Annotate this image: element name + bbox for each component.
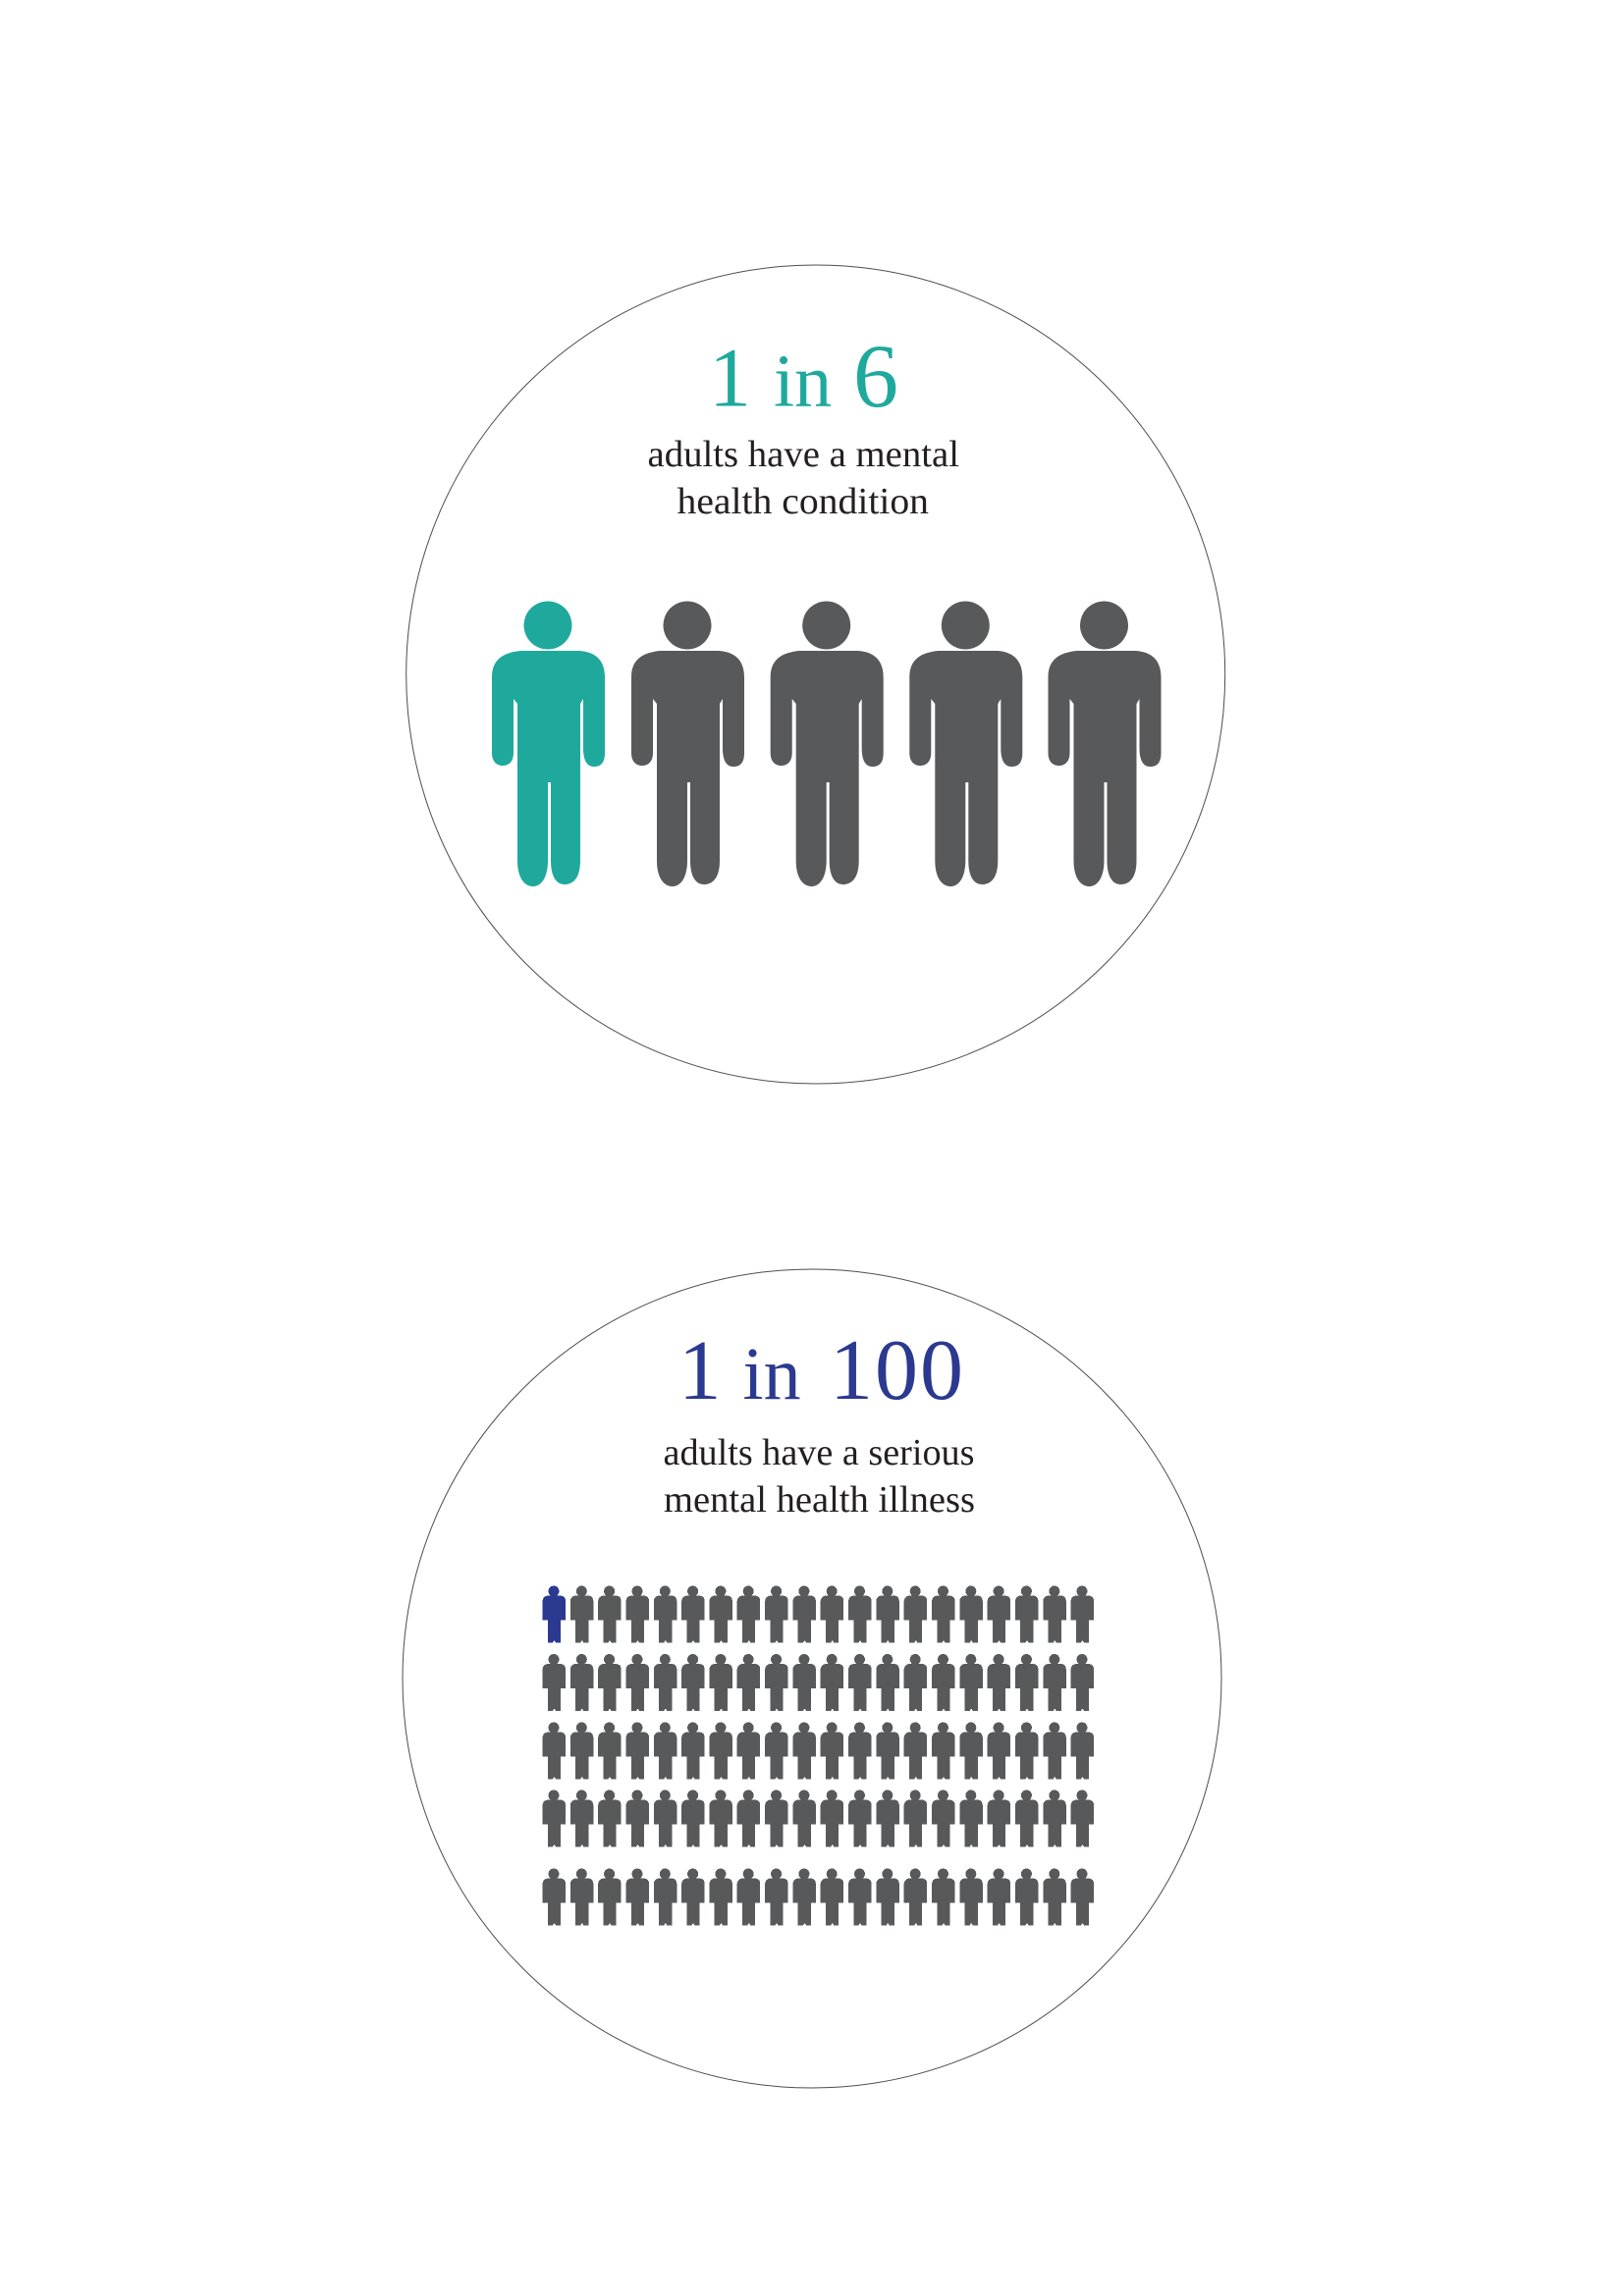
circle outline <box>403 1269 1221 2088</box>
heading: 1 in 100: 100 <box>830 1323 965 1418</box>
row 1 grey people <box>570 1586 1094 1643</box>
row 5 grey people <box>570 1869 1094 1926</box>
text: adults have a serious mental health illness: adults have a serious <box>664 1432 974 1473</box>
heading: 1 in 6: 6 <box>853 326 898 426</box>
text: adults have a serious mental health illness: mental health illness <box>664 1479 975 1521</box>
circle outline <box>406 265 1225 1084</box>
pictogram: five people, one highlighted <box>492 601 1161 886</box>
icon: grey person 3 <box>771 601 884 886</box>
panel: 1 in 6 <box>406 265 1225 1084</box>
heading: 1 in 6: in <box>774 340 832 422</box>
row 4 first person <box>542 1790 566 1847</box>
row 5 first person <box>542 1869 566 1926</box>
row 3 first person <box>542 1722 566 1779</box>
text: adults have a mental health condition: adults have a mental <box>648 434 959 475</box>
icon: highlighted teal person <box>492 601 605 886</box>
row 3 grey people <box>570 1722 1094 1779</box>
panel: 1 in 100 <box>403 1269 1221 2088</box>
row 2 grey people <box>570 1654 1094 1711</box>
row 4 grey people <box>570 1790 1094 1847</box>
heading: 1 in 100: 1 <box>678 1322 721 1417</box>
pictogram: one hundred people, one highlighted <box>542 1586 1094 1926</box>
text: adults have a mental health condition <box>648 434 959 522</box>
text: adults have a serious mental health illness <box>664 1432 975 1521</box>
icon: grey person 4 <box>909 601 1022 886</box>
row 2 first person <box>542 1654 566 1711</box>
icon: highlighted blue person <box>542 1586 566 1643</box>
icon: grey person 2 <box>631 601 744 886</box>
text: adults have a mental health condition: health condition <box>677 481 929 522</box>
icon: grey person 5 <box>1049 601 1161 886</box>
heading: 1 in 6: 1 <box>709 330 751 424</box>
heading: 1 in 100: in <box>742 1333 801 1415</box>
